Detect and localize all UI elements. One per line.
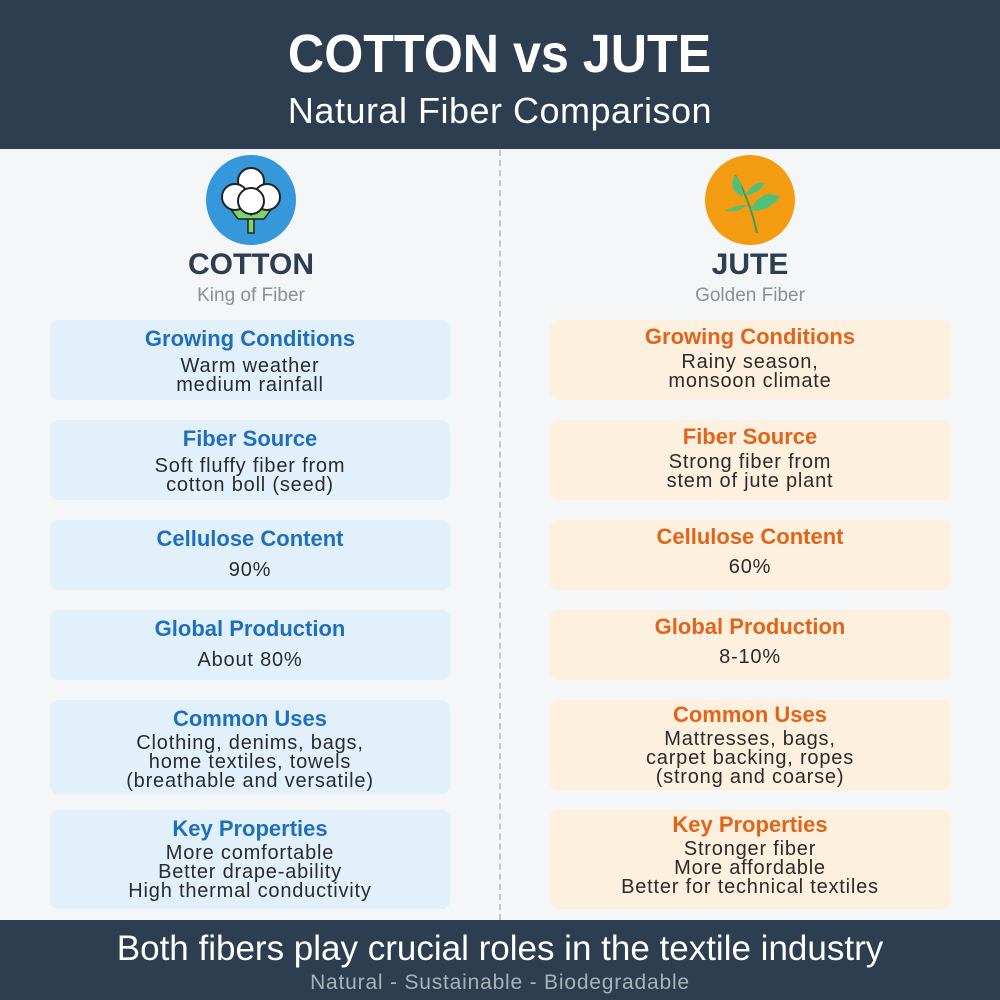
panel: cotton fiber source: Fiber Source	[183, 426, 317, 451]
panel: cotton cellulose: 90%	[229, 559, 271, 581]
icon: jute leaf	[705, 155, 795, 245]
panel: jute properties: More affordable	[674, 857, 826, 879]
footer main text: Both fibers play crucial roles in the textile industry	[117, 929, 883, 968]
panel: cotton production: About 80%	[197, 649, 303, 671]
panel: cotton uses	[50, 700, 450, 794]
panel: cotton properties: More comfortable	[166, 842, 334, 864]
footer subtext: Natural - Sustainable - Biodegradable	[310, 971, 690, 994]
title: COTTON vs JUTE	[288, 24, 712, 84]
panel: cotton growing	[50, 320, 450, 400]
panel: cotton growing: Growing Conditions	[145, 326, 355, 351]
panel: jute cellulose	[550, 520, 950, 590]
panel: cotton growing: Warm weather	[181, 355, 319, 377]
cotton name: COTTON	[188, 248, 314, 281]
panel: jute production	[550, 610, 950, 680]
panel: jute properties: Better for technical textiles	[621, 876, 879, 898]
panel: cotton uses: Clothing, denims, bags,	[136, 732, 364, 754]
panel: jute growing	[550, 320, 950, 400]
panel: jute growing: Growing Conditions	[645, 324, 855, 349]
header	[0, 0, 1000, 149]
panel: jute cellulose: 60%	[729, 556, 771, 578]
panel: jute growing: Rainy season,	[681, 351, 819, 373]
panel: cotton properties: Better drape-ability	[158, 861, 342, 883]
panel: jute production: 8-10%	[719, 646, 781, 668]
panel: cotton properties	[50, 810, 450, 909]
panel: jute properties: Stronger fiber	[684, 838, 816, 860]
panel: jute fiber source: Fiber Source	[683, 424, 817, 449]
panel: jute uses: Mattresses, bags,	[664, 728, 836, 750]
icon: cotton	[206, 155, 296, 245]
panel: jute growing: monsoon climate	[668, 370, 832, 392]
panel: jute production: Global Production	[655, 614, 845, 639]
subtitle: Natural Fiber Comparison	[288, 90, 712, 131]
panel: cotton growing: medium rainfall	[176, 374, 324, 396]
jute tagline: Golden Fiber	[695, 285, 805, 306]
panel: cotton properties: High thermal conductivity	[128, 880, 372, 902]
panel: cotton production: Global Production	[155, 616, 345, 641]
panel: cotton uses: (breathable and versatile)	[126, 770, 374, 792]
panel: jute uses: Common Uses	[673, 702, 827, 727]
panel: cotton production	[50, 610, 450, 680]
footer	[0, 920, 1000, 1000]
jute name: JUTE	[712, 248, 788, 281]
panel: jute uses: carpet backing, ropes	[646, 747, 854, 769]
panel: cotton properties: Key Properties	[172, 816, 328, 841]
panel: cotton uses: Common Uses	[173, 706, 327, 731]
panel: jute cellulose: Cellulose Content	[656, 524, 844, 549]
cotton tagline: King of Fiber	[197, 285, 305, 306]
panel: jute properties: Key Properties	[672, 812, 828, 837]
panel: cotton uses: home textiles, towels	[149, 751, 351, 773]
panel: jute fiber source	[550, 420, 950, 500]
panel: cotton cellulose: Cellulose Content	[156, 526, 344, 551]
panel: jute fiber source: stem of jute plant	[667, 470, 833, 492]
panel: cotton fiber source: cotton boll (seed)	[166, 474, 334, 496]
panel: jute uses: (strong and coarse)	[656, 766, 844, 788]
panel: cotton fiber source	[50, 420, 450, 500]
panel: cotton fiber source: Soft fluffy fiber from	[155, 455, 345, 477]
panel: jute uses	[550, 700, 950, 790]
panel: jute fiber source: Strong fiber from	[669, 451, 831, 473]
panel: jute properties	[550, 810, 950, 909]
panel: cotton cellulose	[50, 520, 450, 590]
